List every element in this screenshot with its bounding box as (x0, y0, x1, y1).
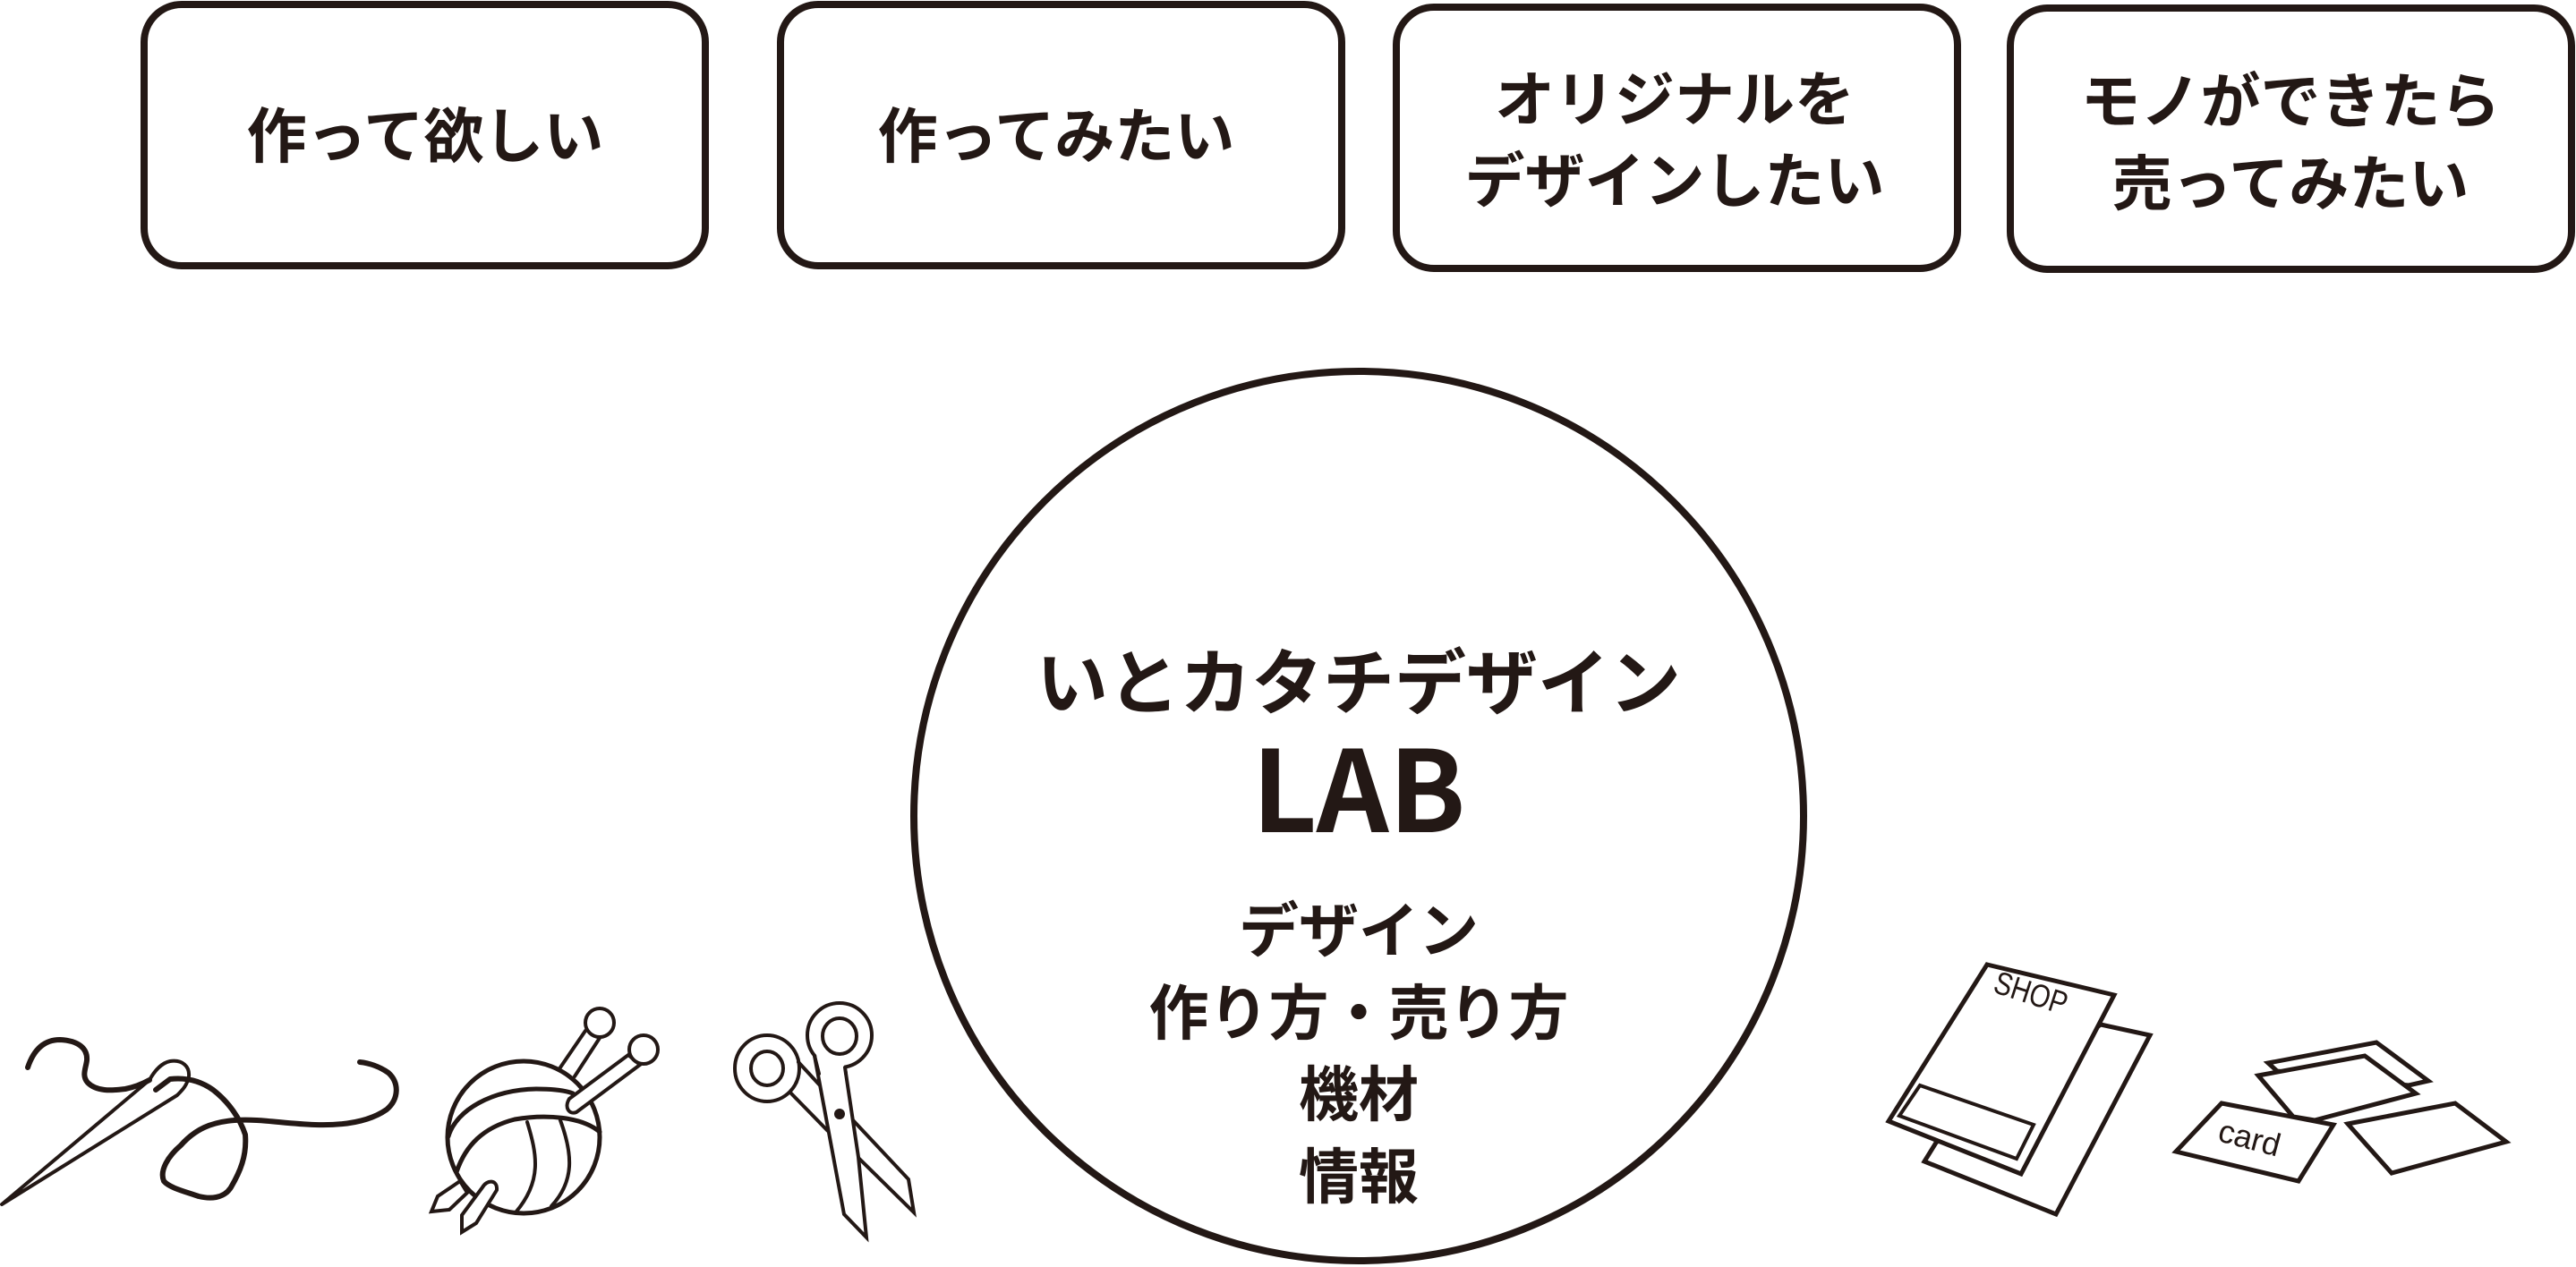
box: オリジナルをデザインしたい (1396, 7, 1958, 268)
circle topics list: デザイン (1239, 883, 1479, 970)
box: 作って欲しい: 作って欲しい (247, 89, 603, 175)
icon: scissors (735, 1003, 914, 1237)
circle topics list: 作り方・売り方 (1149, 965, 1568, 1052)
icon: shop flyers (1889, 964, 2150, 1214)
box: オリジナルをデザインしたい: デザインしたい (1464, 133, 1885, 220)
circle topics list (1149, 883, 1568, 1216)
box: モノができたら売ってみたい: 売ってみたい (2112, 136, 2469, 223)
box: オリジナルをデザインしたい: オリジナルを (1495, 52, 1855, 139)
icon: business cards (2176, 1042, 2506, 1181)
circle topics list: 情報 (1299, 1129, 1419, 1216)
box: 作ってみたい (780, 4, 1342, 266)
icon: yarn ball with knitting needles (431, 1008, 658, 1232)
circle topics list: 機材 (1299, 1047, 1419, 1134)
icon: needle and thread (2, 1040, 397, 1204)
circle heading: いとカタチデザイン (1036, 626, 1681, 730)
LAB title: LAB (1252, 702, 1465, 865)
box: モノができたら売ってみたい (2010, 8, 2572, 269)
box: 作って欲しい (144, 4, 705, 266)
SHOP label: SHOP (1990, 964, 2072, 1022)
card label: card (2214, 1112, 2285, 1163)
box: 作ってみたい: 作ってみたい (878, 89, 1234, 175)
box: モノができたら売ってみたい: モノができたら (2080, 54, 2501, 140)
central circle: いとカタチデザイン LAB (914, 371, 1804, 1261)
